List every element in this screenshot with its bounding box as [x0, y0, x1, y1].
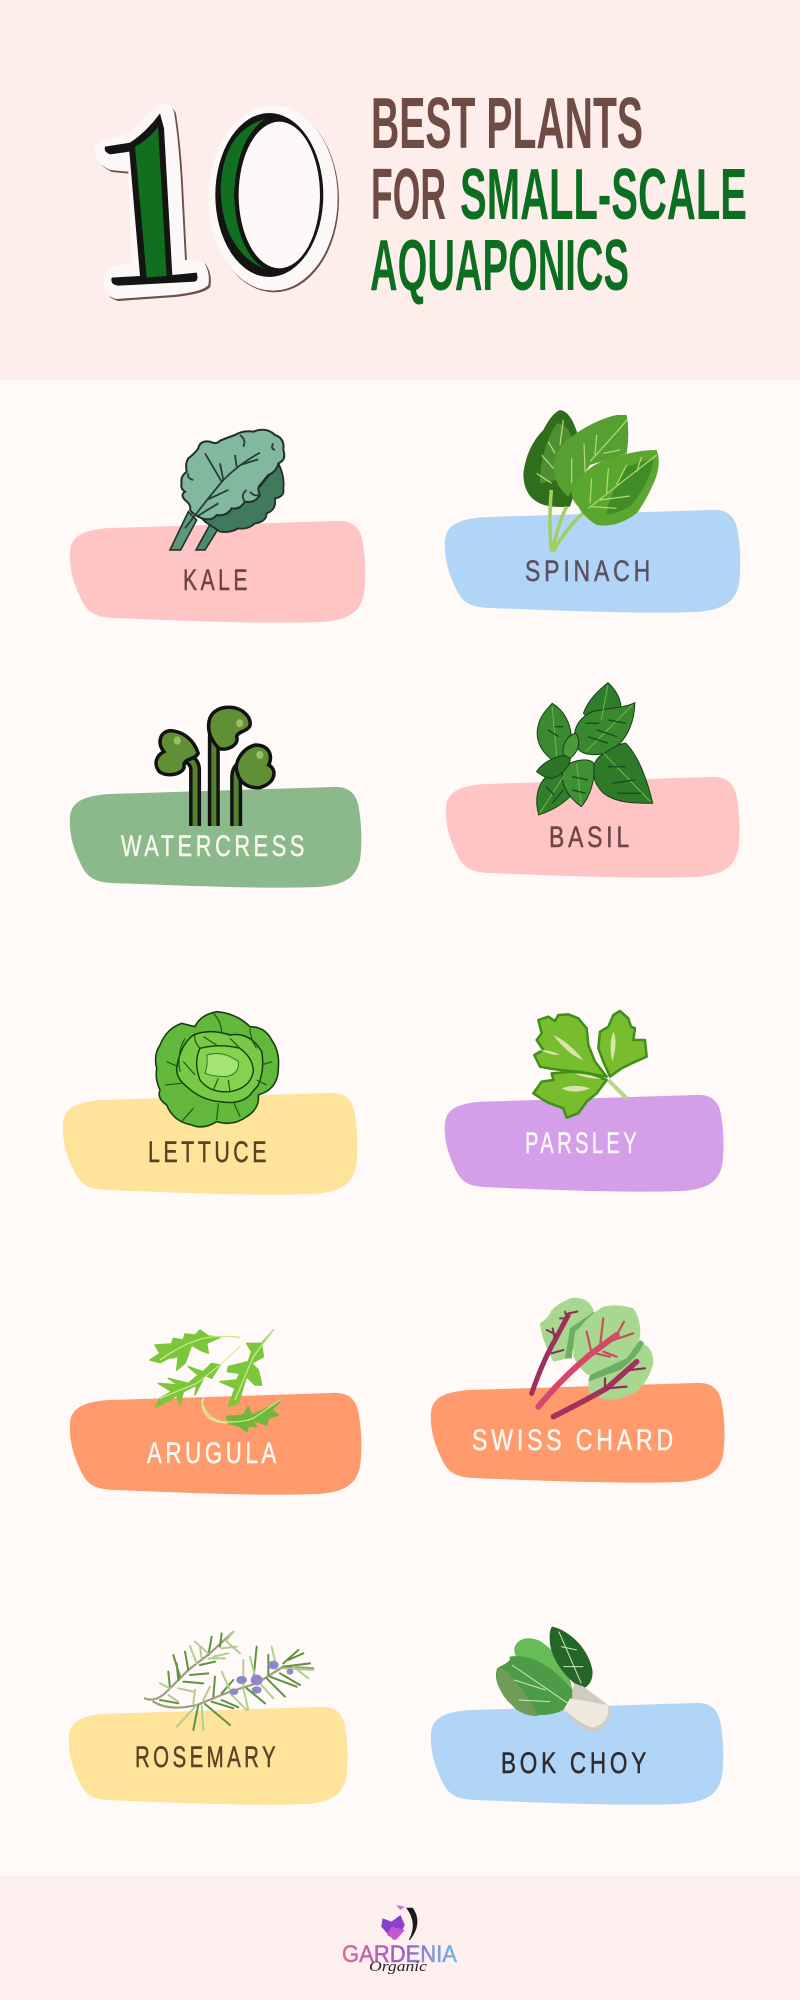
label: rosemary: ROSEMARY — [135, 1741, 279, 1774]
label: swiss chard: SWISS CHARD — [472, 1424, 677, 1457]
header band — [0, 0, 800, 380]
icon: parsley leaf — [533, 1011, 647, 1118]
card: kale — [70, 430, 365, 623]
title — [370, 83, 747, 306]
footer band — [0, 1876, 800, 2000]
card: parsley — [445, 1011, 724, 1192]
card: spinach — [445, 410, 740, 613]
icon: spinach leaves — [523, 410, 659, 552]
title: FOR — [371, 154, 446, 235]
big number 10 sticker — [94, 104, 339, 301]
logo wordmark: GARDENIA — [342, 1941, 457, 1968]
icon: kale leaf — [170, 430, 284, 550]
label: bok choy: BOK CHOY — [501, 1747, 650, 1780]
card: arugula — [70, 1330, 361, 1495]
icon: lettuce head — [156, 1012, 279, 1127]
icon: basil leaves — [537, 683, 653, 815]
card: swiss chard — [431, 1298, 725, 1483]
icon: watercress sprouts — [156, 707, 274, 826]
logo script: Organic — [369, 1959, 427, 1975]
icon: arugula sprigs — [150, 1330, 280, 1432]
card: basil — [446, 683, 740, 878]
card: lettuce — [63, 1012, 357, 1195]
digit 1 — [94, 104, 211, 301]
label: basil: BASIL — [549, 821, 633, 854]
icon: bok choy — [496, 1627, 611, 1732]
card: rosemary — [69, 1632, 348, 1805]
card: bok choy — [431, 1627, 723, 1805]
logo flower icon — [381, 1905, 417, 1940]
icon: rosemary sprigs — [145, 1632, 313, 1730]
label: parsley: PARSLEY — [525, 1127, 640, 1160]
label: watercress: WATERCRESS — [121, 830, 308, 863]
card: watercress — [70, 707, 361, 888]
label: kale: KALE — [183, 564, 251, 597]
label: arugula: ARUGULA — [147, 1437, 280, 1470]
icon: swiss chard — [532, 1298, 653, 1417]
logo: Gardenia Organic — [342, 1905, 457, 1975]
label: spinach: SPINACH — [525, 555, 654, 588]
label: lettuce: LETTUCE — [148, 1136, 270, 1169]
digit 0 — [208, 105, 339, 292]
